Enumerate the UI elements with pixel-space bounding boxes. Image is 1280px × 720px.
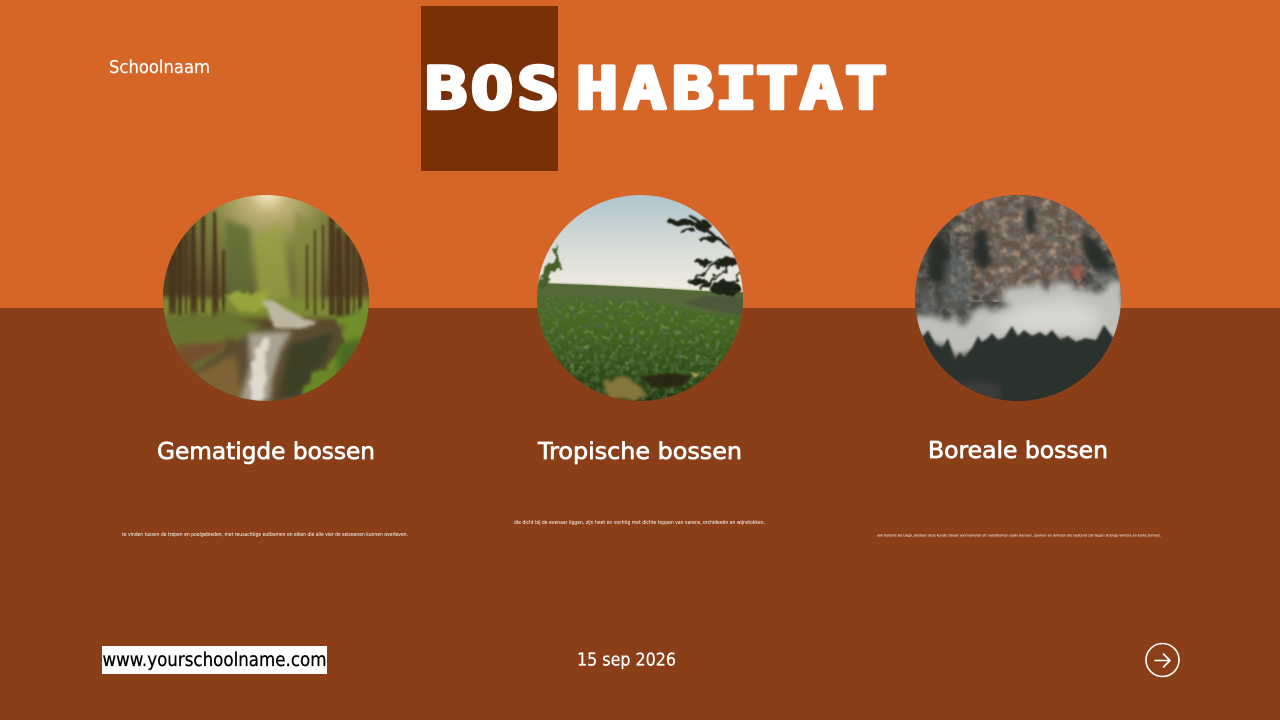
heading: Boreale bossen: Boreale bossen <box>928 436 1108 464</box>
background: orange top band <box>0 0 1280 308</box>
stream and pool <box>192 325 345 404</box>
foreground grass and rock <box>604 376 648 400</box>
heading: Gematigde bossen: Gematigde bossen <box>157 437 375 465</box>
text: boreal description: ook bekend als taiga, bestaat deze koude streek voornamelijk uit naaldbomen zoals dennen, sparren en lariksen die bestand zijn tegen strenge winters en korte zomers. <box>877 534 1161 538</box>
school name: Schoolnaam <box>109 58 210 78</box>
photo: temperate forest stream <box>160 192 372 404</box>
website label: www.yourschoolname.com <box>102 650 326 671</box>
title block <box>421 6 887 171</box>
website label <box>102 646 327 674</box>
title word: BOS: BOS <box>425 56 559 123</box>
photo: boreal forest with fog <box>912 192 1124 404</box>
text: temperate description: te vinden tussen de tropen en poolgebieden, met reusachtige eutbomen en eiken die alle vier de seizoenen kunnen overleven. <box>122 532 408 538</box>
fog band <box>912 282 1124 358</box>
date: 15 sep 2026 <box>577 650 676 670</box>
heading: Tropische bossen: Tropische bossen <box>537 437 742 465</box>
background: brown bottom band <box>0 308 1280 720</box>
title word: HABITAT: HABITAT <box>576 56 887 123</box>
dark conifer silhouette <box>922 324 1114 401</box>
text: tropical description: die dicht bij de evenaar liggen, zijn heet en vochtig met dichte toppen van varens, orchideeën en wijnstokken. <box>514 520 765 526</box>
tree branches <box>667 216 742 296</box>
icon: next arrow <box>1146 644 1179 676</box>
title highlight box <box>421 6 558 171</box>
photo: tropical forest landscape <box>534 192 746 404</box>
